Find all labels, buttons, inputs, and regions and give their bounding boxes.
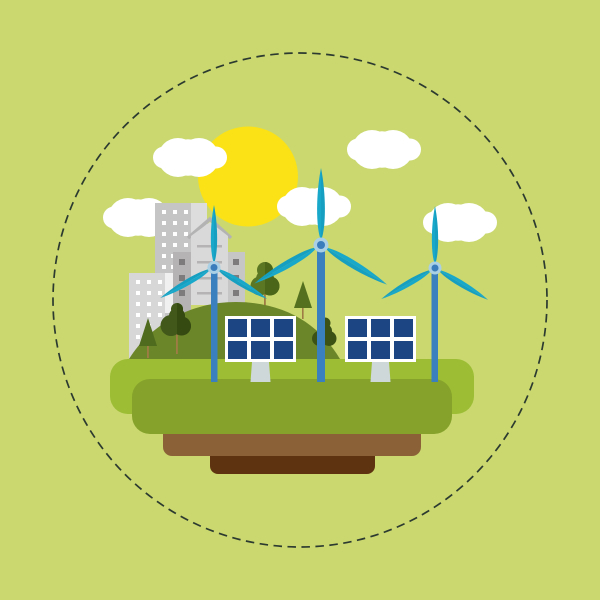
central house building with roof bbox=[173, 219, 245, 312]
conifer: hill right bbox=[294, 281, 312, 319]
sun bbox=[198, 126, 298, 226]
illustration: green energy floating island bbox=[52, 52, 548, 548]
wind turbine: right bbox=[380, 206, 490, 382]
island: dark grass layer bbox=[132, 379, 452, 434]
solar panel: left bbox=[225, 316, 296, 382]
conifer: hill left bbox=[139, 318, 157, 358]
island: dark soil base bbox=[210, 456, 375, 474]
wind turbine: centre bbox=[252, 168, 389, 382]
cloud: right bbox=[423, 203, 497, 242]
dashed circle bbox=[53, 53, 547, 547]
tall grey building bbox=[155, 203, 207, 333]
cloud: centre bbox=[277, 187, 351, 226]
solar panel: right bbox=[345, 316, 416, 382]
tree: hill centre bbox=[312, 318, 336, 346]
tree: behind hill right bbox=[250, 262, 280, 306]
low left building bbox=[129, 273, 173, 359]
cloud: far left bbox=[103, 198, 177, 237]
cloud: top right bbox=[347, 130, 421, 169]
island: brown soil layer bbox=[163, 430, 421, 456]
island: light grass layer bbox=[110, 359, 474, 414]
tree: hill left bbox=[160, 303, 191, 354]
cloud: over sun bbox=[153, 138, 227, 177]
wind turbine: left bbox=[159, 205, 269, 382]
hill bbox=[129, 302, 340, 359]
